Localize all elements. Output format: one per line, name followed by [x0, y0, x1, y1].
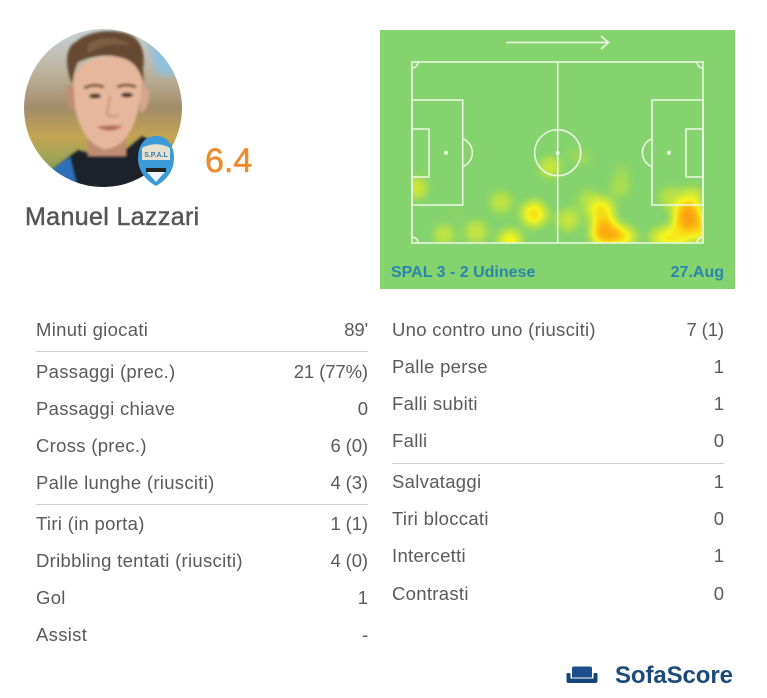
stat row: 1 — [714, 545, 724, 566]
stat row: 0 — [714, 583, 724, 604]
stat row: - — [362, 624, 368, 645]
stat row: 0 — [714, 430, 724, 451]
brand name: SofaScore — [615, 662, 733, 689]
stat row: Uno contro uno (riusciti) — [392, 319, 596, 340]
icon: club badge — [138, 136, 174, 186]
match label: SPAL 3 - 2 Udinese — [391, 264, 535, 281]
pitch lines — [412, 62, 703, 243]
stat row: Gol — [36, 587, 66, 608]
stat row — [36, 624, 368, 645]
stat row: Assist — [36, 624, 87, 645]
stat row: Tiri bloccati — [392, 508, 489, 529]
stat row: Intercetti — [392, 545, 466, 566]
stat row: 89' — [344, 319, 368, 340]
stat row — [36, 472, 368, 493]
stat row: 1 — [714, 356, 724, 377]
stat row: 1 — [358, 587, 368, 608]
stat row: Contrasti — [392, 583, 469, 604]
stat row: Passaggi (prec.) — [36, 361, 176, 382]
stat row: Palle perse — [392, 356, 488, 377]
player name: Manuel Lazzari — [25, 203, 200, 231]
heatmap blobs — [412, 148, 702, 242]
stat row: 6 (0) — [330, 435, 368, 456]
stat row — [36, 361, 368, 382]
stat row: Falli — [392, 430, 427, 451]
stats column: left — [36, 319, 368, 645]
stat row — [36, 319, 368, 340]
stat row — [392, 393, 724, 414]
stat row: Falli subiti — [392, 393, 478, 414]
stats column: right — [392, 319, 724, 604]
stat row: 1 (1) — [330, 513, 368, 534]
icon: sofa logo — [566, 666, 598, 683]
stat row — [392, 508, 724, 529]
stat row: 1 — [714, 471, 724, 492]
stat row: Tiri (in porta) — [36, 513, 145, 534]
stat row: 7 (1) — [686, 319, 724, 340]
player photo — [24, 29, 182, 187]
stat row — [392, 430, 724, 451]
stat row — [392, 319, 724, 340]
pitch background — [380, 30, 735, 289]
stat row — [392, 583, 724, 604]
stat row — [392, 471, 724, 492]
heatmap panel — [380, 30, 735, 289]
match date: 27.Aug — [671, 264, 724, 281]
stat row — [36, 513, 368, 534]
stat row: Palle lunghe (riusciti) — [36, 472, 215, 493]
stat row: Salvataggi — [392, 471, 481, 492]
stat row: Dribbling tentati (riusciti) — [36, 550, 243, 571]
stat row — [392, 356, 724, 377]
stat row: 0 — [358, 398, 368, 419]
stat row: Minuti giocati — [36, 319, 148, 340]
stat row: 21 (77%) — [294, 361, 368, 382]
stat row: 1 — [714, 393, 724, 414]
arrow: attack direction — [506, 36, 608, 49]
stat row: 4 (3) — [330, 472, 368, 493]
rating: 6.4 — [205, 142, 252, 180]
stat row — [392, 545, 724, 566]
stat row: Passaggi chiave — [36, 398, 175, 419]
icon: club badge: S.P.A.L — [144, 152, 169, 159]
stat row: 0 — [714, 508, 724, 529]
stat row — [36, 398, 368, 419]
stat row — [36, 587, 368, 608]
stat row: Cross (prec.) — [36, 435, 147, 456]
stat row — [36, 435, 368, 456]
stat row: 4 (0) — [330, 550, 368, 571]
stat row — [36, 550, 368, 571]
